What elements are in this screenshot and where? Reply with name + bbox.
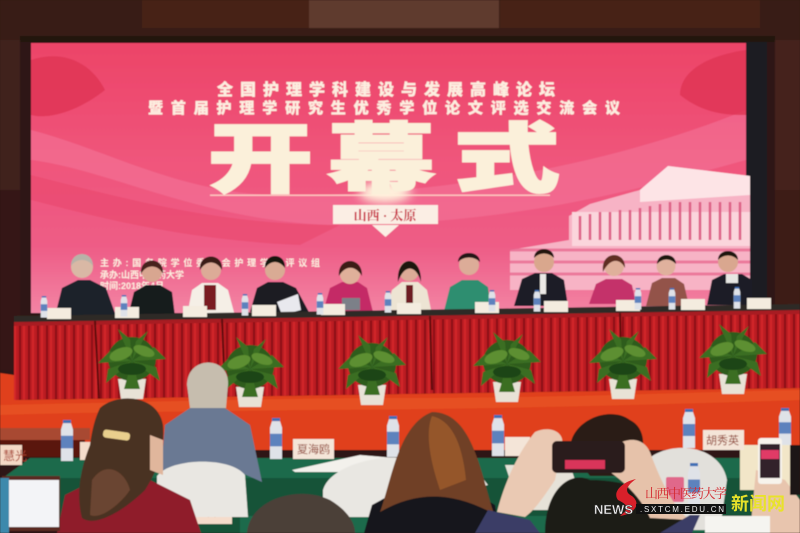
opening ceremony heading: 开	[208, 118, 313, 203]
bottles on head table	[41, 287, 740, 317]
name cards on audience table	[0, 430, 744, 524]
stage front	[0, 373, 800, 457]
audience bottles	[61, 408, 791, 461]
name cards on audience table: 夏海鸥	[297, 442, 330, 456]
white paper on table	[705, 516, 770, 533]
head in foreground	[247, 494, 355, 533]
member 2	[128, 260, 175, 316]
screen title	[148, 80, 620, 117]
raised phone at right	[747, 438, 800, 533]
head table cloth	[14, 304, 800, 400]
member 10	[646, 255, 689, 306]
name cards on audience table: 胡秀英	[706, 433, 739, 447]
member 4	[250, 256, 310, 315]
organisers text	[100, 257, 320, 291]
woman in red sweater	[57, 398, 201, 533]
name cards on audience table: 慧光	[3, 448, 27, 463]
opening ceremony heading	[208, 117, 560, 203]
projection screen	[31, 43, 750, 313]
screen title: 全国护理学科建设与发展高峰论坛	[217, 80, 555, 99]
site address bar: .SXTCM.EDU.CN	[640, 505, 724, 514]
screen ribbon waves	[31, 50, 746, 245]
news network label: 新闻网	[731, 493, 785, 514]
watermark logo	[594, 479, 785, 517]
member 8	[514, 249, 568, 306]
member 1	[55, 254, 116, 316]
laptop	[0, 476, 60, 533]
university name: 山西中医药大学	[645, 483, 727, 502]
opening ceremony heading: 式	[454, 117, 560, 203]
building illustration	[510, 166, 750, 290]
white chairs	[157, 448, 727, 530]
location tag	[333, 205, 438, 237]
NEWS wordmark: NEWS	[594, 502, 633, 517]
member 7	[444, 253, 491, 311]
member 9	[589, 255, 636, 304]
person photographing with phone	[475, 414, 700, 533]
member 6	[387, 261, 431, 310]
audience table	[0, 445, 800, 533]
name cards on head table	[47, 298, 771, 319]
organisers text: 主办:国务院学位委员会护理学科评议组	[100, 257, 320, 268]
potted plants	[98, 324, 767, 407]
member 3	[187, 256, 235, 316]
seated man in grey suit	[160, 362, 262, 482]
member 5	[323, 261, 373, 312]
woman in black with long hair	[364, 412, 500, 533]
member 11	[707, 251, 752, 305]
opening ceremony heading: 幕	[327, 117, 436, 202]
name cards on audience table: 瑛	[204, 505, 216, 519]
logo mark	[616, 479, 636, 516]
screen title: 暨首届护理学研究生优秀学位论文评选交流会议	[148, 99, 620, 117]
organisers text: 承办:山西中医药大学	[100, 269, 184, 280]
location tag: 山西 · 太原	[354, 208, 417, 223]
cup and bottle on chair	[666, 463, 700, 506]
organisers text: 时间:2018年4月	[100, 280, 164, 291]
panel members	[55, 249, 752, 316]
